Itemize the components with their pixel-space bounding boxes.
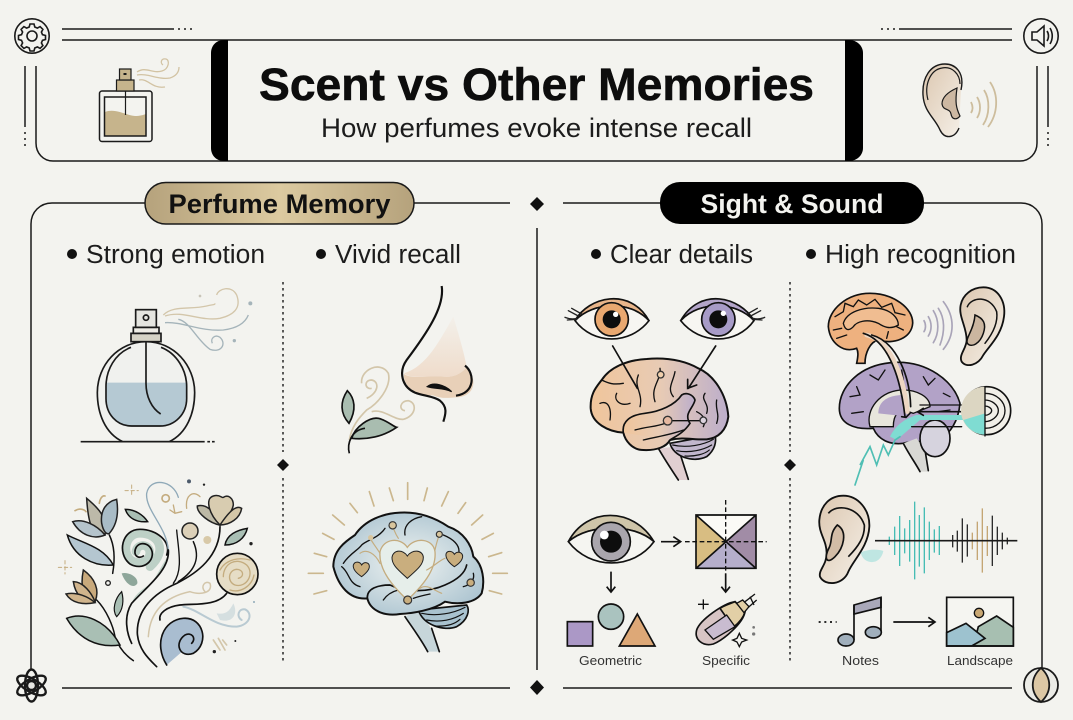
title: Scent vs Other Memories [259,59,814,110]
illustration: floral scent swirl [58,479,258,667]
icon: music notes [819,597,881,646]
icon: atom [14,670,49,702]
bullet: vivid recall: Vivid recall [335,241,461,269]
panel: sight and sound frame [537,203,1042,688]
header bar left [211,40,228,161]
icon: specific vial [696,594,757,647]
chart: sound waveform [875,502,1017,579]
icon: gray eye [568,515,654,563]
icon: ear with blue splash [819,496,885,583]
label: specific: Specific [702,654,750,668]
illustration: side brain with arrows [591,346,728,480]
arrow: notes to landscape [893,617,935,627]
header bar right [845,40,863,161]
icon: round perfume bottle [81,289,252,442]
icon: globe lens [1024,668,1058,702]
label: geometric: Geometric [579,654,642,668]
illustration: brain with hearts [308,483,507,652]
bullet: high recognition: High recognition [825,241,1016,269]
heading pill: perfume memory: Perfume Memory [168,189,390,219]
icon: geometric shapes [567,604,655,646]
dotted column dividers [283,282,790,662]
panel: perfume memory frame [31,203,510,688]
icon: arrows down [607,572,730,592]
heading pill: sight and sound [660,182,924,224]
heading pill: perfume memory [145,182,414,224]
header frame [25,29,1048,161]
illustration: auditory brain pathway [828,287,1011,485]
icon: orange and purple eyes [565,299,765,339]
icon: arrow to square [661,537,681,547]
icon: landscape picture [947,597,1013,646]
icon: nose with scent [342,286,473,453]
icon: gear [15,19,49,53]
icon: divided square [685,500,767,580]
icon: small perfume bottle [100,59,179,142]
label: landscape: Landscape [947,654,1013,668]
diamond markers [277,197,796,695]
bullet: strong emotion: Strong emotion [86,241,265,269]
label: notes: Notes [842,654,879,668]
heading pill: sight and sound: Sight & Sound [700,189,884,219]
bullet: clear details: Clear details [610,241,753,269]
icon: small ear with sound waves [923,64,996,137]
icon: speaker [1024,19,1058,53]
subtitle: How perfumes evoke intense recall [321,113,752,143]
